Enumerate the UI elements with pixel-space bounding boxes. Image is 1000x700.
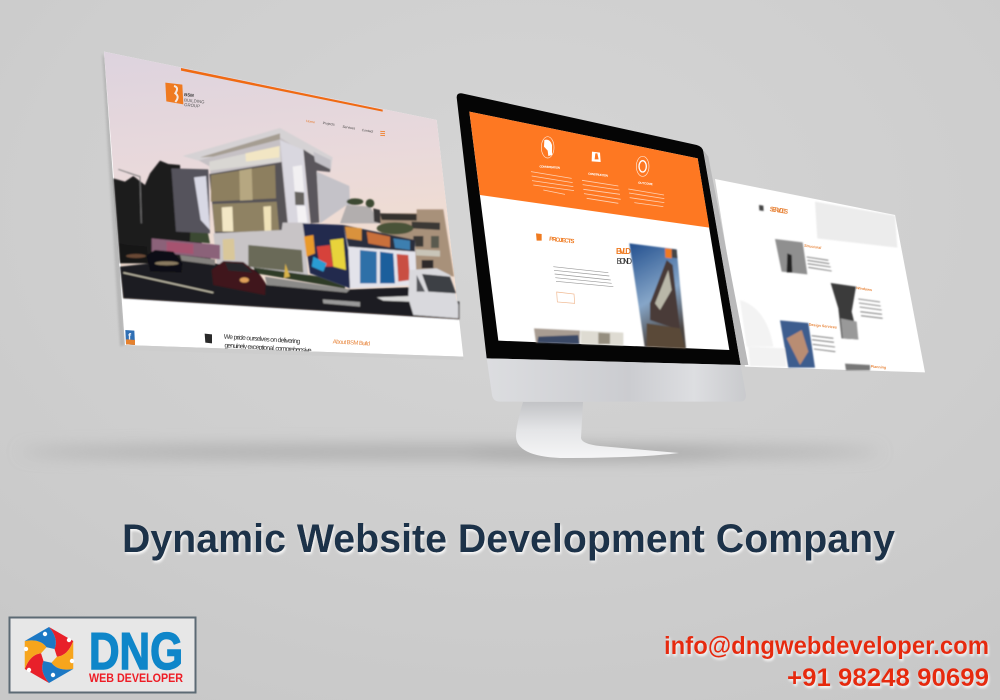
contact email: info@dngwebdeveloper.com [664, 632, 989, 660]
lamp post [118, 169, 141, 223]
facebook badge [125, 330, 135, 345]
panel: right website screen [715, 179, 925, 372]
low graffiti fence [152, 238, 220, 259]
page background [104, 52, 463, 357]
project label: BVLD [616, 247, 631, 256]
text lines [807, 257, 832, 271]
orange top line [181, 68, 383, 112]
panel: right website screen: Windows [856, 286, 872, 292]
building left dark wall [171, 168, 210, 233]
BSM logo: BUILDING [184, 97, 205, 105]
project photo [534, 243, 686, 349]
navigation: Home [306, 119, 315, 124]
building main white block [195, 137, 310, 233]
intro text [205, 334, 312, 355]
project label: BOND [617, 257, 632, 266]
graffiti wall [303, 223, 417, 288]
panel: left website screen [102, 52, 463, 360]
contact phone: +91 98248 90699 [787, 664, 989, 692]
white van [408, 268, 458, 318]
red car [212, 261, 266, 295]
side edge [703, 150, 748, 365]
woman in yellow [284, 263, 290, 278]
title: Dynamic Website Development Company [122, 517, 896, 561]
charcoal wall [303, 149, 331, 223]
floor shadow [20, 446, 880, 458]
light cube [317, 172, 350, 223]
feature copy [531, 172, 664, 207]
image 4 [845, 364, 870, 370]
hero sky [104, 52, 459, 319]
panel: right website screen: Planning [871, 365, 886, 370]
BSM logo: GROUP [184, 102, 200, 109]
project label [616, 247, 632, 266]
image 1 [775, 239, 807, 274]
intro text: We pride ourselves on delivering [224, 334, 301, 345]
trees [113, 161, 213, 263]
hero photograph [113, 128, 459, 319]
feature icons [541, 137, 649, 176]
terrace and plants [340, 205, 380, 223]
bezel [457, 93, 741, 365]
about link: About BSM Build [333, 339, 370, 348]
top balcony [209, 146, 281, 171]
cover page bottom overflow [125, 345, 463, 360]
image 3 [780, 320, 815, 368]
logo tagline: WEB DEVELOPER [89, 673, 184, 685]
BSM logo: BSM [184, 92, 194, 98]
page [715, 179, 925, 372]
faded dome [740, 300, 773, 347]
feature headings [539, 164, 653, 186]
image 2 [831, 283, 858, 339]
monitor stand [516, 402, 679, 458]
thumbnail row [534, 328, 580, 344]
orange banner [469, 112, 709, 228]
road [120, 260, 459, 319]
BSM logo [165, 83, 205, 109]
logo box [10, 618, 196, 692]
shrubs [248, 245, 303, 273]
faded skyline [815, 202, 897, 248]
lower wall [213, 223, 308, 277]
right white column [280, 140, 309, 223]
navigation [306, 119, 385, 136]
navigation: Services [342, 125, 356, 130]
cars [119, 243, 148, 263]
project copy [553, 267, 613, 287]
intro text: genuinely exceptional, comprehensive [224, 342, 312, 355]
section mark [759, 205, 764, 211]
dark frame [209, 162, 288, 233]
chin [487, 358, 746, 402]
icon: hexagonal swirl [13, 620, 85, 690]
facebook badge: f [128, 331, 132, 341]
read more button [557, 292, 575, 303]
services heading: SERVICES [769, 206, 789, 216]
panel: right website screen: Design Services [809, 323, 837, 330]
logo wordmark: DNG [89, 623, 183, 681]
feature headings: CONSTRUCTION [588, 172, 608, 178]
panel: right website screen: Structural [804, 244, 822, 250]
feature headings: CONVERSATION [539, 164, 560, 170]
navigation: Projects [323, 121, 335, 127]
panel: monitor [457, 93, 748, 402]
projects mark [536, 233, 542, 241]
navigation: Contact [362, 128, 374, 134]
distant building [380, 209, 454, 277]
screen white [469, 112, 729, 350]
projects heading: PROJECTS [549, 237, 575, 245]
roof [183, 128, 333, 171]
feature headings: OUTCOME [638, 181, 653, 186]
